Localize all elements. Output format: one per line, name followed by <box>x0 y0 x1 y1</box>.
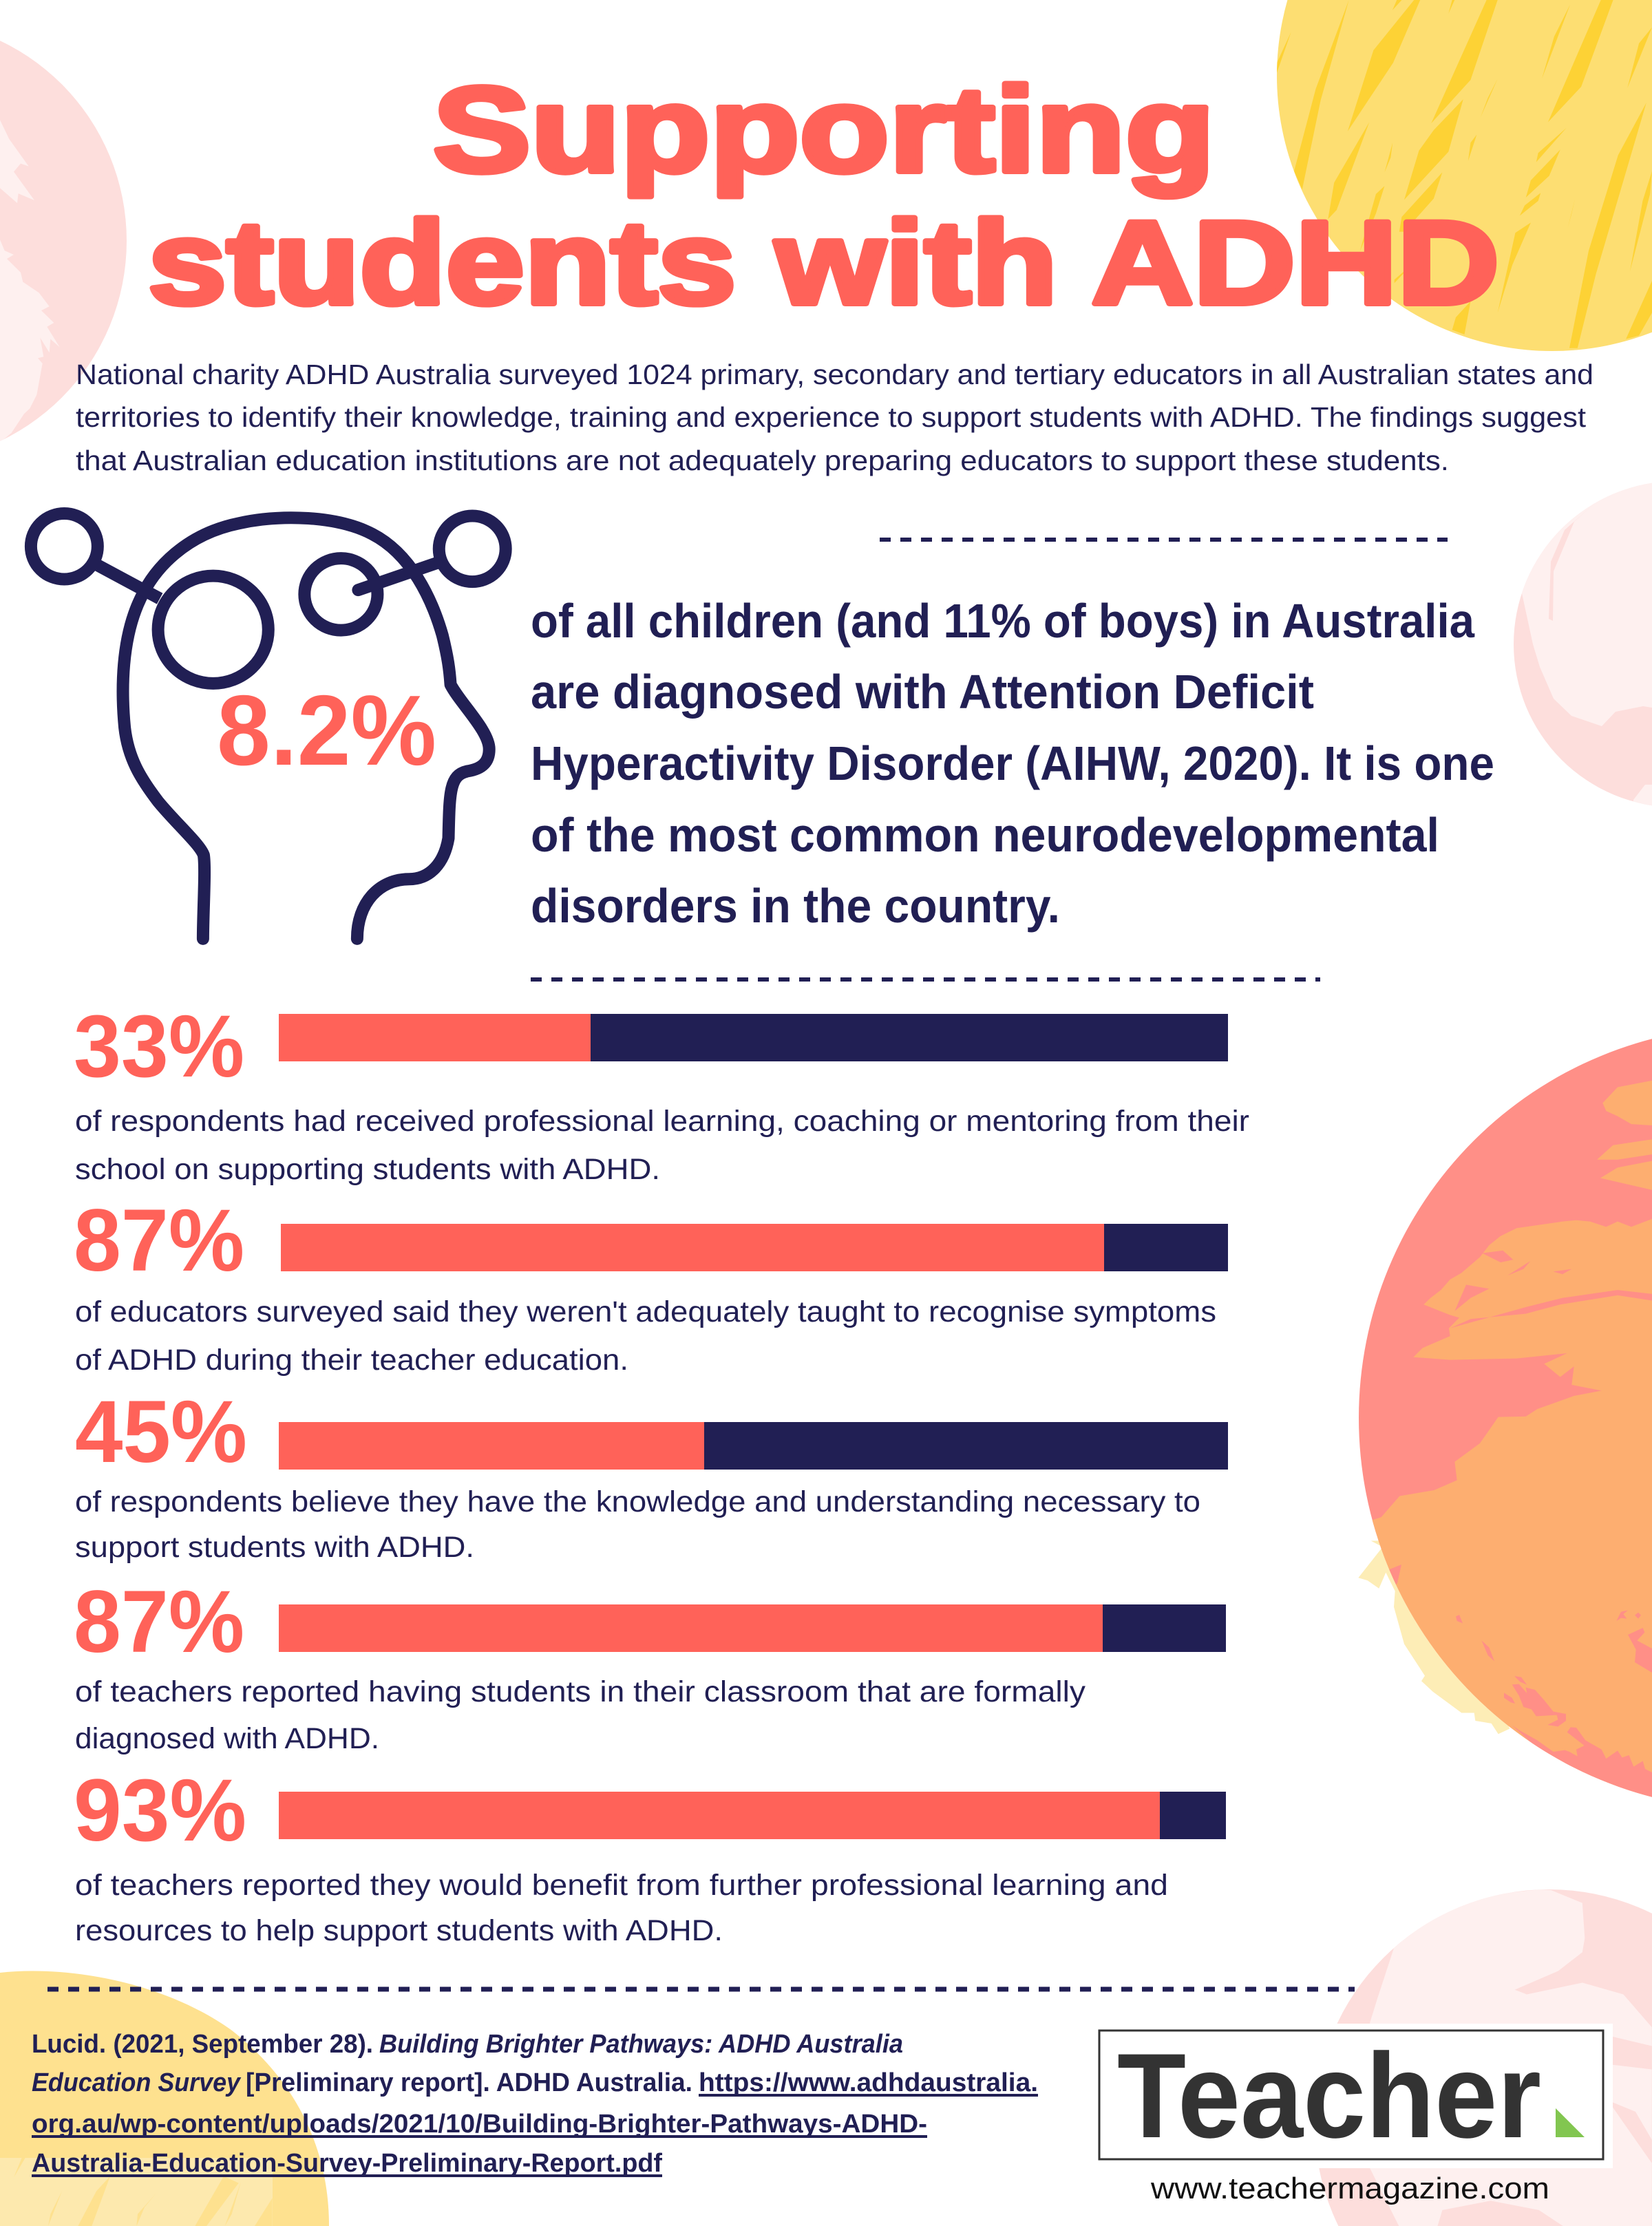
citation: Australia-Education-Survey-Preliminary-Report.pdf <box>32 2149 662 2178</box>
stat 33%: of respondents had received professional learning, coaching or mentoring from their <box>75 1105 1249 1138</box>
stat 45%: of respondents believe they have the knowledge and understanding necessary to <box>75 1485 1200 1518</box>
background blob: large coral and orange circle <box>1359 1039 1652 1797</box>
title <box>148 63 1499 329</box>
stat 93%: resources to help support students with ADHD. <box>75 1914 723 1947</box>
intro paragraph: that Australian education institutions are not adequately preparing educators to support these students. <box>76 445 1449 476</box>
website URL: www.teachermagazine.com <box>1150 2172 1549 2205</box>
citation: https://www.adhdaustralia. <box>699 2068 1038 2097</box>
background blob: pink circle bottom right <box>1311 1886 1652 2226</box>
logo: Teacher: Teacher <box>1117 2029 1541 2163</box>
stat 45% <box>75 1383 1228 1564</box>
intro paragraph: territories to identify their knowledge, training and experience to support students with ADHD. The findings suggest <box>76 401 1587 433</box>
stat 87% educators <box>74 1191 1228 1377</box>
stat 87% educators: of educators surveyed said they weren't adequately taught to recognise symptoms <box>75 1295 1216 1328</box>
citation: Education Survey <box>32 2068 242 2097</box>
citation: [Preliminary report]. ADHD Australia. <box>246 2068 692 2097</box>
headline statement <box>531 540 1494 979</box>
icon: head with connected circles and 8.2 percent <box>31 513 506 939</box>
citation: Lucid. (2021, September 28). <box>32 2030 373 2059</box>
background blob: pale yellow fringe <box>1358 1540 1510 1734</box>
stat 33%: school on supporting students with ADHD. <box>75 1153 660 1186</box>
citation: Building Brighter Pathways: ADHD Australia <box>379 2030 903 2059</box>
intro paragraph <box>76 359 1593 476</box>
stat 33%: 33% <box>74 997 244 1096</box>
intro paragraph: National charity ADHD Australia surveyed 1024 primary, secondary and tertiary educators in all Australian states and <box>76 359 1593 390</box>
stat 87% teachers: diagnosed with ADHD. <box>75 1722 379 1755</box>
background blob: pink circle right of headline <box>1507 475 1652 812</box>
title: Supporting <box>433 63 1215 198</box>
title: students with ADHD <box>148 197 1499 329</box>
stat 93%: 93% <box>74 1761 246 1860</box>
stat 33% <box>74 997 1249 1186</box>
headline statement: are diagnosed with Attention Deficit <box>531 665 1314 719</box>
citation: org.au/wp-content/uploads/2021/10/Building-Brighter-Pathways-ADHD- <box>32 2110 927 2139</box>
stat 93% <box>74 1761 1226 1947</box>
stat 87% teachers: 87% <box>74 1573 244 1671</box>
background blob: yellow shape bottom left <box>0 1971 329 2226</box>
stat 93%: of teachers reported they would benefit from further professional learning and <box>75 1869 1168 1902</box>
headline statement: disorders in the country. <box>531 879 1060 933</box>
stat 87% educators: 87% <box>74 1191 244 1290</box>
citation <box>32 2030 1038 2178</box>
headline statement: Hyperactivity Disorder (AIHW, 2020). It is one <box>531 736 1494 790</box>
stat 45%: 45% <box>75 1383 247 1481</box>
icon: head with connected circles and 8.2 percent: 8.2% <box>217 675 436 786</box>
headline statement: of all children (and 11% of boys) in Australia <box>531 594 1475 648</box>
stat 87% teachers: of teachers reported having students in their classroom that are formally <box>75 1675 1086 1708</box>
stat 87% teachers <box>74 1573 1226 1755</box>
stat 45%: support students with ADHD. <box>75 1531 474 1564</box>
background blob: yellow circle top right <box>1273 0 1652 354</box>
headline statement: of the most common neurodevelopmental <box>531 808 1439 862</box>
stat 87% educators: of ADHD during their teacher education. <box>75 1344 628 1377</box>
background blob: pink circle top left <box>0 41 127 441</box>
